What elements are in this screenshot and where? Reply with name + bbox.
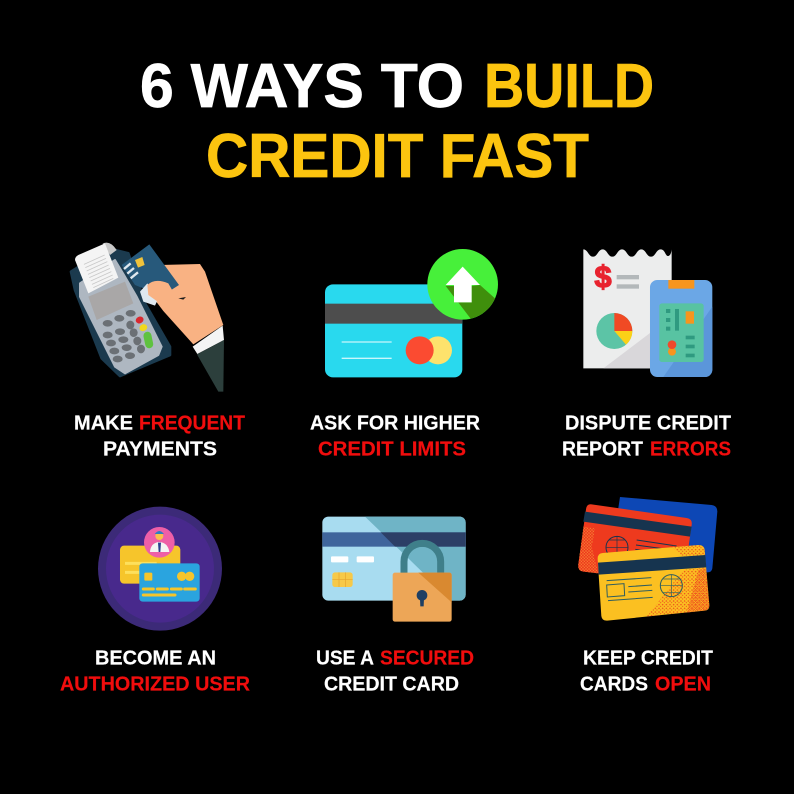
label: dispute credit report errors: DISPUTE CREDIT [565,412,731,434]
label: make frequent payments: MAKE [74,412,133,434]
label: use a secured credit card: SECURED [380,648,474,670]
title: BUILD [484,52,654,121]
label: ask for higher credit limits: CREDIT LIMITS [318,438,466,460]
label: use a secured credit card: CREDIT CARD [324,674,459,696]
label: keep credit cards open: KEEP CREDIT [583,648,713,670]
label: use a secured credit card: USE A [316,648,374,670]
label: become an authorized user [60,648,251,696]
label: make frequent payments: PAYMENTS [103,438,217,460]
icon: stack of credit cards [578,497,717,621]
label: make frequent payments [74,412,245,460]
icon: payment terminal and hand [71,243,224,392]
label: dispute credit report errors [562,412,731,460]
label: ask for higher credit limits [310,412,481,460]
label: use a secured credit card [316,648,474,696]
title: CREDIT FAST [206,122,589,191]
icon: receipt and phone [583,249,712,377]
icon: receipt and phone: $ [594,260,612,294]
label: keep credit cards open: OPEN [655,674,711,696]
label: dispute credit report errors: REPORT [562,438,643,460]
label: become an authorized user: BECOME AN [95,648,216,670]
icon: card with padlock [322,517,466,622]
title: 6 WAYS TO [140,52,464,121]
title [140,52,654,191]
icon: credit card with up arrow [325,249,498,377]
label: make frequent payments: FREQUENT [139,412,245,434]
label: ask for higher credit limits: ASK FOR HIGHER [310,412,481,434]
label: keep credit cards open [580,648,713,696]
label: keep credit cards open: CARDS [580,674,648,696]
label: dispute credit report errors: ERRORS [650,438,731,460]
icon: authorized user cards [98,507,222,631]
label: become an authorized user: AUTHORIZED USER [60,674,251,696]
